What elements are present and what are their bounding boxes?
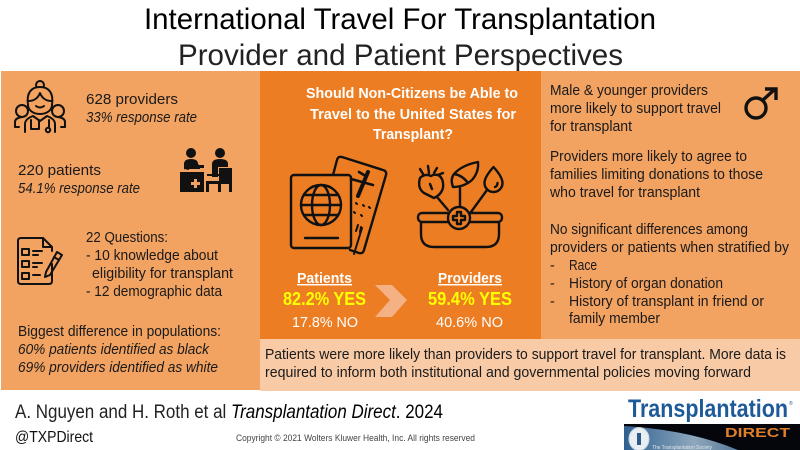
text: biggest difference: 60% patients identified as black xyxy=(18,342,210,358)
panel: survey question xyxy=(260,71,541,339)
stats: patients: Patients xyxy=(297,271,352,287)
panel: study population xyxy=(1,71,260,390)
text: male and younger: Male & younger providers xyxy=(550,83,708,99)
text: male and younger: more likely to support travel xyxy=(550,101,721,117)
stats: providers: 59.4% YES xyxy=(428,289,512,309)
stat: providers: 628 providers xyxy=(86,92,178,108)
text: no significant differences xyxy=(550,222,790,327)
panel: conclusion: Patients were more likely than providers to support travel for transplant. More data is xyxy=(265,347,786,363)
text: no significant differences: Race xyxy=(569,258,597,274)
text: questions: - 12 demographic data xyxy=(86,284,223,300)
text: male and younger: for transplant xyxy=(550,119,632,135)
text: no significant differences: History of transplant in friend or xyxy=(569,294,764,310)
text: no significant differences: - xyxy=(550,294,555,310)
stat: patients: 220 patients xyxy=(18,163,101,179)
text: families limiting donations xyxy=(549,149,763,201)
stat: providers xyxy=(86,92,197,126)
stats: patients xyxy=(283,271,366,331)
arrow: comparison chevron xyxy=(375,285,407,317)
stat: patients xyxy=(18,163,140,197)
stats: providers: 40.6% NO xyxy=(436,315,503,331)
title xyxy=(144,3,656,72)
text: no significant differences: family member xyxy=(569,311,660,327)
text: male and younger xyxy=(550,83,721,135)
logo: Transplantation Direct: DIRECT xyxy=(725,425,790,440)
text: biggest difference: 69% providers identified as white xyxy=(18,360,218,376)
stats: patients: 82.2% YES xyxy=(283,289,366,309)
text: families limiting donations: Providers more likely to agree to xyxy=(550,149,747,165)
icon: patient at desk xyxy=(180,148,232,192)
text: no significant differences: - xyxy=(550,276,555,292)
icon: questionnaire xyxy=(18,238,62,284)
text: no significant differences: - xyxy=(550,258,555,274)
icon: donated organs basket xyxy=(418,162,502,247)
icon: healthcare providers xyxy=(15,81,65,132)
text: no significant differences: History of organ donation xyxy=(569,276,723,292)
heading: question: Travel to the United States for xyxy=(310,106,516,123)
text: no significant differences: providers or patients when stratified by xyxy=(550,240,790,256)
stat: providers: 33% response rate xyxy=(86,110,197,126)
text: families limiting donations: families limiting donations to those xyxy=(550,167,763,183)
logo: Transplantation Direct xyxy=(624,395,800,450)
text: families limiting donations: who travel for transplant xyxy=(549,185,700,201)
text: no significant differences: No significant differences among xyxy=(550,222,748,238)
stats: providers xyxy=(428,271,512,331)
stats: providers: Providers xyxy=(438,271,502,287)
text: questions: 22 Questions: xyxy=(86,230,168,246)
title: Provider and Patient Perspectives xyxy=(178,39,623,72)
text: questions xyxy=(86,230,233,300)
citation: A. Nguyen and H. Roth et al Transplantation Direct. 2024 xyxy=(15,402,443,423)
title: International Travel For Transplantation xyxy=(144,3,656,36)
text: questions: eligibility for transplant xyxy=(92,266,233,282)
icon: passport and ticket xyxy=(291,157,386,254)
text: biggest difference xyxy=(18,324,221,376)
heading: question xyxy=(306,85,518,143)
icon: male symbol xyxy=(746,89,776,118)
panel: findings xyxy=(541,71,800,339)
panel: conclusion xyxy=(260,339,800,391)
twitter handle: @TXPDirect xyxy=(15,429,93,446)
panel: conclusion: required to inform both institutional and governmental policies moving forward xyxy=(265,365,751,381)
text: biggest difference: Biggest difference in populations: xyxy=(18,324,221,340)
stats: patients: 17.8% NO xyxy=(292,315,358,331)
heading: question: Should Non-Citizens be Able to xyxy=(306,85,518,102)
logo: Transplantation Direct: ® xyxy=(789,400,793,407)
copyright: Copyright © 2021 Wolters Kluwer Health, Inc. All rights reserved xyxy=(236,433,475,443)
heading: question: Transplant? xyxy=(373,126,453,143)
stat: patients: 54.1% response rate xyxy=(18,181,140,197)
text: questions: - 10 knowledge about xyxy=(86,248,218,264)
